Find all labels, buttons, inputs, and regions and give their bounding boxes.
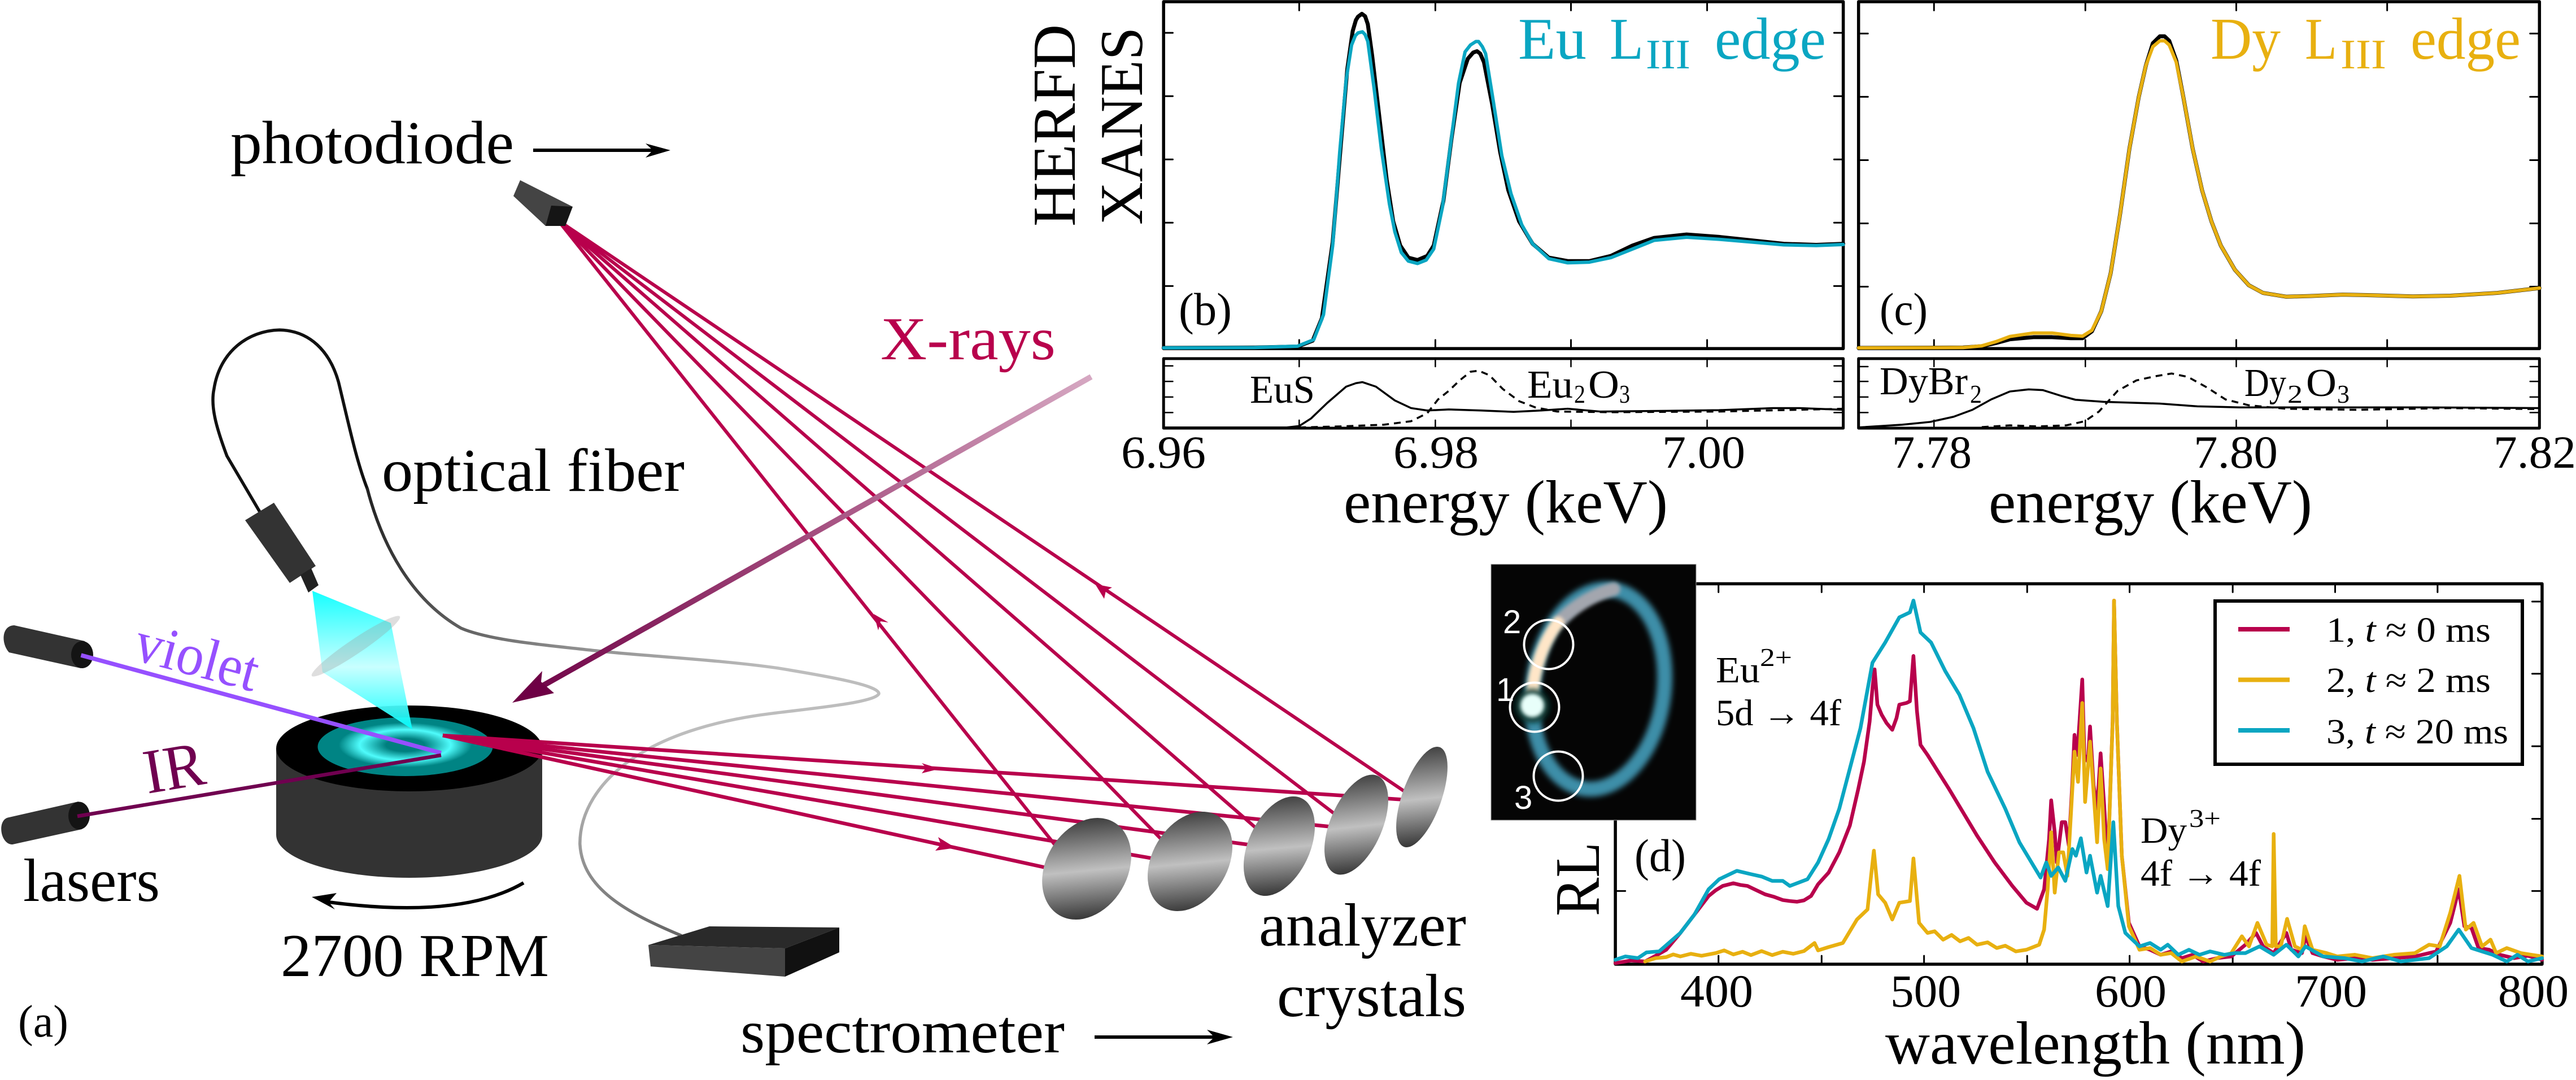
region numbers: 2 [1503,604,1521,641]
icon: spectrometer box [648,926,839,977]
x tick labels b: 6.96 [1121,426,1206,478]
label: Eu2O3 [1527,363,1630,408]
x axis label d: wavelength (nm) [1885,1010,2305,1077]
spectrometer arrow [1095,1030,1233,1044]
x tick labels d: 600 [2095,965,2167,1017]
title: Eu L III edge: L [1610,6,1644,72]
label: spectrometer: spectrometer [740,999,1065,1066]
panel letter (a): (a) [18,997,68,1047]
legend [2215,601,2522,764]
chart: Dy reference spectra [1859,359,2539,428]
x tick labels d [1680,965,2569,1017]
chart: RL spectra [1615,583,2542,964]
label: Dy2O3 [2244,362,2350,408]
title: Eu L III edge: III [1646,32,1690,78]
panel letter (d): (d) [1634,830,1686,881]
label: EuS: EuS [1250,368,1315,412]
title: Dy L III edge: III [2340,32,2386,78]
panel b: Eu L-III edge HERFD XANES [1021,2,1843,536]
x tick labels c [1892,426,2576,478]
label: lasers: lasers [23,847,160,914]
legend: 2, t ≈ 2 ms [2326,661,2491,700]
label: 2700 RPM: 2700 RPM [281,922,549,990]
optical fiber cable [213,330,879,935]
rays from sample to analyzer crystals [443,735,1406,870]
icon: cyan luminescence cone [312,591,412,729]
x tick labels b: 6.98 [1393,426,1479,478]
x tick labels c: 7.82 [2494,426,2576,478]
title: Eu L III edge [1518,6,1826,78]
label: Eu2O3: 3 [1619,380,1630,408]
y axis label: XANES: XANES [1088,27,1156,225]
annotation: Eu2+ 5d to 4f: Eu [1716,650,1760,691]
x tick labels c: 7.80 [2194,426,2278,478]
x tick labels d: 500 [1890,965,1961,1017]
legend: 1, t ≈ 0 ms [2326,611,2491,650]
warm arc [1532,589,1614,696]
label: Dy2O3: O [2306,362,2337,405]
x axis label b: energy (keV) [1344,469,1668,536]
title: Dy L III edge: edge [2411,6,2521,72]
title: Dy L III edge: Dy [2211,6,2281,72]
IR laser beam [77,755,441,816]
x tick labels d: 800 [2498,965,2569,1017]
panel d: radioluminescence spectra [1491,564,2569,1077]
panel a: experimental setup [1,110,1466,1066]
inset: luminescence ring photo [1491,564,1696,820]
panel c: Dy L-III edge HERFD XANES [1859,2,2576,536]
X-ray beam arrow [512,377,1091,703]
chart: Eu reference spectra [1163,359,1843,428]
x axis label c: energy (keV) [1989,469,2312,536]
rays from analyzer crystals to photodiode [558,220,1412,853]
label: Dy2O3: 3 [2337,380,2350,408]
icon: violet laser [3,625,93,668]
label: photodiode: photodiode [230,110,514,177]
annotation: Dy3+ 4f to 4f: 4f → 4f [2141,853,2261,894]
label: IR: IR [138,728,210,808]
annotation: Eu2+ 5d to 4f: 2+ [1760,643,1792,672]
annotation: Dy3+ 4f to 4f: Dy [2141,810,2187,851]
x tick labels c: 7.78 [1892,426,1972,478]
label: Dy2O3: Dy [2244,362,2286,405]
region numbers: 1 [1496,672,1514,708]
icon: fiber connector [245,503,319,593]
annotation: Eu2+ 5d to 4f [1716,643,1841,734]
x tick labels d: 700 [2295,965,2367,1017]
title: Eu L III edge: edge [1715,6,1826,72]
chart: Dy spectra [1859,2,2539,349]
label: violet: violet [128,609,266,704]
photodiode arrow [533,143,670,158]
analyzer crystals [1024,741,1458,936]
label: Eu2O3: Eu [1527,363,1573,407]
annotation: Dy3+ 4f to 4f [2141,804,2261,894]
violet laser beam [81,655,441,753]
blue ring [1519,581,1677,798]
legend: 3, t ≈ 20 ms [2326,713,2508,751]
label: Eu2O3: 2 [1574,380,1585,408]
icon: photodiode [513,180,573,226]
label: crystals: crystals [1277,963,1466,1030]
title: Dy L III edge [2211,6,2521,78]
panel letter (b): (b) [1179,284,1232,335]
label: optical fiber: optical fiber [382,437,685,504]
annotation: Dy3+ 4f to 4f: 3+ [2189,804,2221,833]
icon: rotating sample cylinder [276,706,542,878]
label: DyBr2: DyBr [1880,360,1968,403]
region numbers: 3 [1514,779,1532,816]
label: analyzer: analyzer [1259,892,1466,959]
label: Eu2O3: O [1588,363,1619,407]
y axis label: RL: RL [1543,842,1613,916]
title: Eu L III edge: Eu [1518,6,1586,72]
icon: IR laser [1,802,90,844]
x tick labels b [1121,426,1745,478]
icon: lens [308,611,404,682]
region circles [1510,620,1583,801]
x tick labels b: 7.00 [1662,426,1745,478]
label: X-rays: X-rays [881,306,1056,373]
label: DyBr2: 2 [1970,380,1982,408]
y axis label: HERFD: HERFD [1021,24,1088,227]
x tick labels d: 400 [1680,965,1753,1017]
title: Dy L III edge: L [2305,6,2337,72]
rotation arrow [312,883,524,909]
panel letter (c): (c) [1880,284,1928,335]
bright spot [1515,689,1549,723]
chart: Eu spectra [1163,2,1843,349]
region numbers [1496,604,1532,816]
label: Dy2O3: 2 [2287,380,2303,408]
annotation: Eu2+ 5d to 4f: 5d → 4f [1716,693,1841,734]
